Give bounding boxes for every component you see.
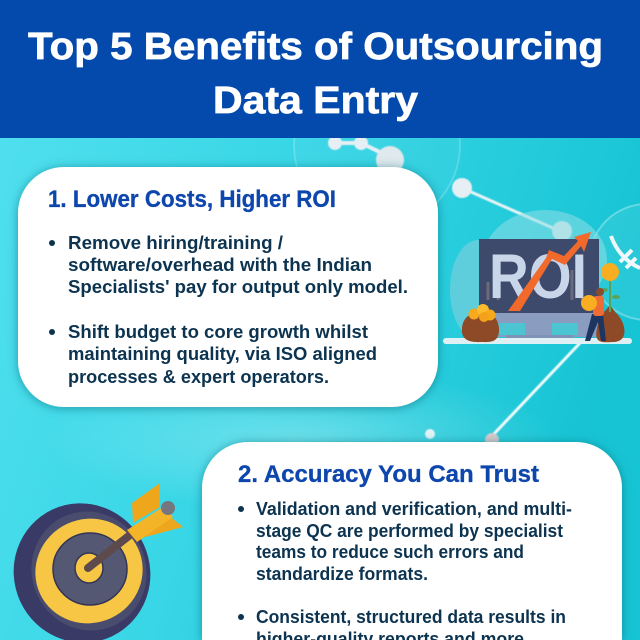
coin plant <box>600 263 620 312</box>
icon: target with arrow <box>0 481 183 640</box>
bullet point 3 <box>238 498 572 584</box>
bullet point 2 <box>49 321 377 387</box>
arrow <box>88 483 183 568</box>
panel: benefit 1 <box>18 167 438 407</box>
bullet point 3: standardize formats. <box>256 563 428 584</box>
bullet point 1 <box>49 232 408 297</box>
money bag right <box>596 305 624 342</box>
monitor: ROI <box>489 242 587 312</box>
DNA helix <box>611 236 640 268</box>
title: Data Entry <box>213 80 418 122</box>
heading: benefit 1: 1. Lower Costs, Higher ROI <box>48 186 336 213</box>
bullet point 1: software/overhead with the Indian <box>68 254 372 275</box>
molecule network lines <box>328 136 580 447</box>
bullet point 3: teams to reduce such errors and <box>256 541 524 562</box>
bullet point 1: Specialists' pay for output only model. <box>68 276 408 297</box>
heading: benefit 2: 2. Accuracy You Can Trust <box>238 461 539 488</box>
header band <box>0 0 640 138</box>
bullet point 2: processes & expert operators. <box>68 366 329 387</box>
bullet point 3: stage QC are performed by specialist <box>256 520 563 541</box>
bullet point 1: Remove hiring/training / <box>68 232 283 253</box>
bullet point 2: maintaining quality, via ISO aligned <box>68 343 377 364</box>
bullet point 3: Validation and verification, and multi- <box>256 498 572 519</box>
icon: ROI monitor illustration <box>443 210 640 344</box>
monitor <box>479 239 599 338</box>
title: Top 5 Benefits of Outsourcing <box>28 26 603 68</box>
bullet point 2: Shift budget to core growth whilst <box>68 321 368 342</box>
bullet point 4: Consistent, structured data results in <box>256 606 566 627</box>
panel: benefit 2 <box>202 442 622 640</box>
money bag left <box>462 304 499 342</box>
bullet point 4 <box>238 610 565 640</box>
growth arrow <box>508 232 591 311</box>
person with coin <box>581 288 606 341</box>
